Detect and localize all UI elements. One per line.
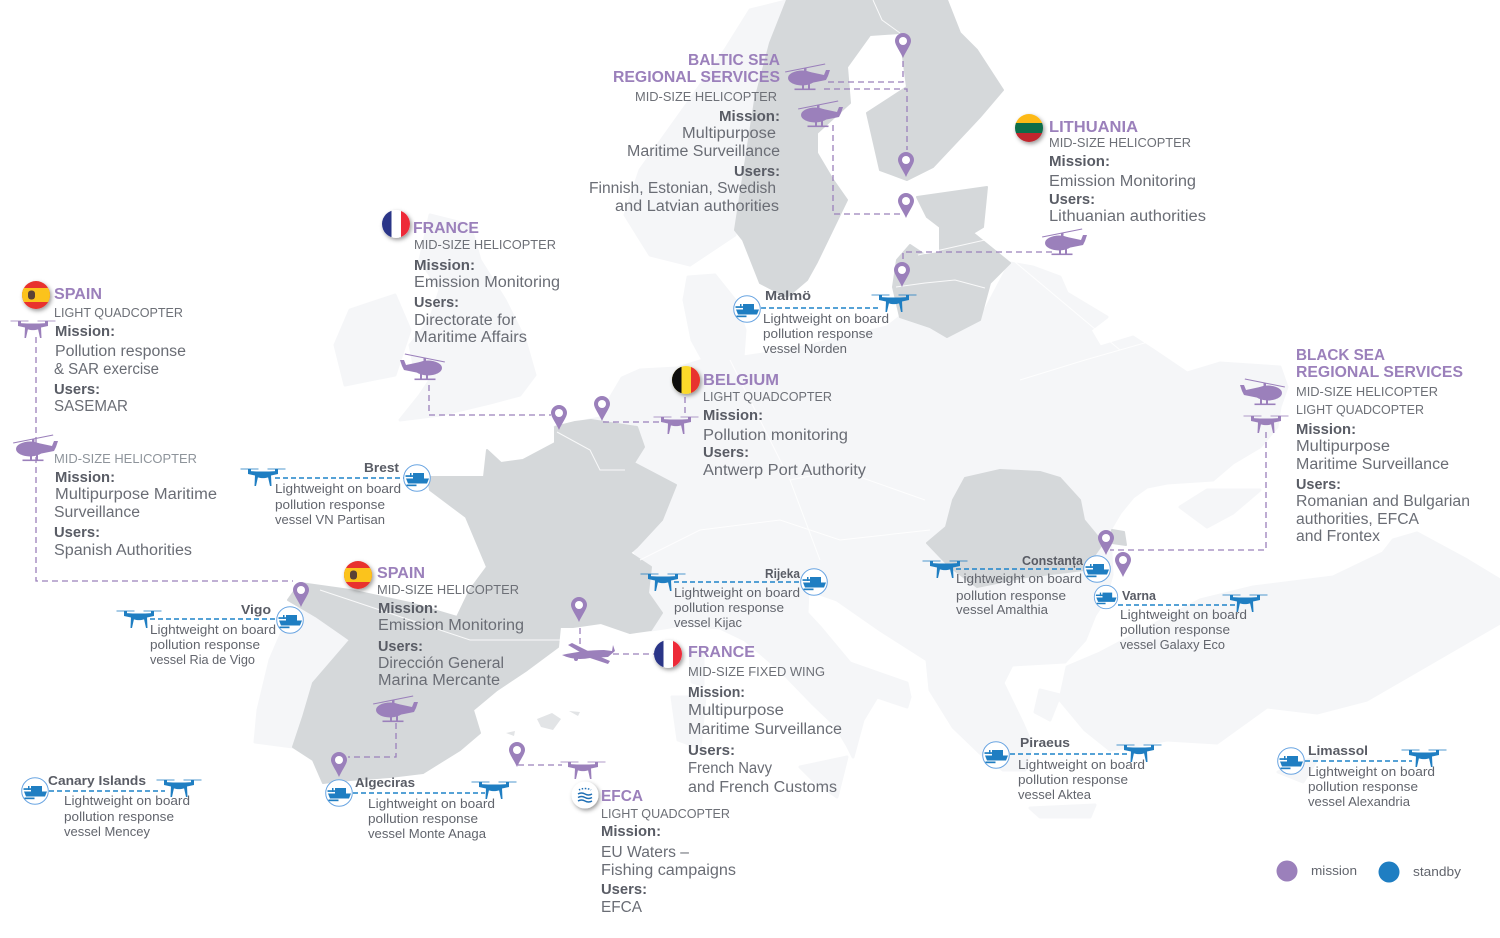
panel: France emission monitoring (382, 210, 560, 346)
panel: Spain emission monitoring (344, 561, 524, 689)
panel: Baltic Sea regional services: Maritime Surveillance (627, 143, 780, 160)
vessel: Algeciras: vessel Monte Anaga (368, 827, 486, 841)
vessel: Rijeka: Lightweight on board (674, 586, 800, 600)
vessel: Piraeus: Piraeus (1020, 735, 1070, 750)
panel: Spain left, quadcopter and helicopter (22, 281, 217, 559)
panel: Belgium: LIGHT QUADCOPTER (703, 389, 832, 404)
panel: EFCA: Mission: (601, 823, 661, 840)
panel: Lithuania: Lithuanian authorities (1049, 208, 1206, 225)
panel: Spain left, quadcopter and helicopter: SASEMAR (54, 398, 128, 415)
panel: France emission monitoring: Maritime Affairs (414, 329, 527, 346)
panel: EFCA: Fishing campaigns (601, 862, 736, 879)
panel: France emission monitoring: FRANCE (413, 220, 479, 237)
mission aircraft icons (10, 64, 1288, 779)
vessel: Constanța: Lightweight on board (956, 572, 1082, 586)
panel: Black Sea regional services: Mission: (1296, 421, 1356, 438)
panel: Baltic Sea regional services (589, 52, 780, 215)
panel: EFCA: EFCA (601, 788, 643, 805)
panel: Black Sea regional services (1296, 347, 1470, 545)
panel: Spain left, quadcopter and helicopter: Multipurpose Maritime (55, 486, 217, 503)
legend: standby (1413, 865, 1462, 879)
panel: Black Sea regional services: BLACK SEA (1296, 347, 1385, 364)
panel: Belgium: Users: (703, 444, 749, 461)
panel: Spain left, quadcopter and helicopter: Mission: (55, 469, 115, 486)
panel: Baltic Sea regional services: Mission: (719, 108, 780, 125)
panel: Spain left, quadcopter and helicopter: Users: (54, 381, 100, 398)
vessel: Varna: Lightweight on board (1120, 608, 1247, 622)
vessel: Vigo: Vigo (241, 602, 271, 617)
panel: Baltic Sea regional services: MID-SIZE HELICOPTER (635, 89, 777, 104)
vessel: Varna: vessel Galaxy Eco (1120, 638, 1225, 652)
legend (1276, 860, 1462, 882)
panel: France emission monitoring: MID-SIZE HELICOPTER (414, 237, 556, 252)
panel: Spain left, quadcopter and helicopter: Surveillance (54, 504, 140, 521)
vessel: Constanța (922, 553, 1110, 617)
panel: Baltic Sea regional services: REGIONAL SERVICES (613, 69, 780, 86)
panel: France emission monitoring: Emission Monitoring (414, 274, 560, 291)
panel: France emission monitoring: Directorate for (414, 312, 516, 329)
panel: Belgium (672, 366, 866, 479)
panel: Lithuania: LITHUANIA (1049, 119, 1138, 136)
panel: France emission monitoring: Mission: (414, 257, 475, 274)
vessel: Varna: pollution response (1120, 623, 1230, 637)
panel: Black Sea regional services: and Frontex (1296, 528, 1380, 545)
panel: France fixed wing (654, 640, 842, 796)
vessel: Malmö: Lightweight on board (763, 312, 889, 326)
panel: Spain emission monitoring: SPAIN (377, 565, 425, 582)
map of Europe (255, 0, 1500, 817)
vessel: Varna: Varna (1122, 588, 1157, 603)
panel: Lithuania: Emission Monitoring (1049, 173, 1196, 190)
vessel: Rijeka: Rijeka (765, 566, 801, 581)
vessel: Rijeka: vessel Kijac (674, 616, 742, 630)
panel: France fixed wing: Mission: (688, 684, 745, 701)
vessel: Piraeus: Lightweight on board (1018, 758, 1145, 772)
panel: Black Sea regional services: MID-SIZE HELICOPTER (1296, 384, 1438, 399)
panel: EFCA: Users: (601, 881, 647, 898)
vessel: Constanța: Constanța (1022, 553, 1084, 568)
vessel: Canary Islands: Lightweight on board (64, 794, 190, 808)
vessel: Rijeka: pollution response (674, 601, 784, 615)
icon: fixed wing aircraft (562, 643, 615, 664)
panel: EFCA: EFCA (601, 899, 643, 916)
vessel: Piraeus: pollution response (1018, 773, 1128, 787)
panel: Spain left, quadcopter and helicopter: LIGHT QUADCOPTER (54, 305, 183, 320)
vessel: Malmö: vessel Norden (763, 342, 847, 356)
panel: France fixed wing: Users: (688, 742, 735, 759)
panel: Baltic Sea regional services: BALTIC SEA (688, 52, 780, 69)
panel: Lithuania (1015, 114, 1206, 225)
panel: Black Sea regional services: Romanian and Bulgarian (1296, 493, 1470, 510)
land: highlighted countries (288, 0, 1126, 783)
panel: Black Sea regional services: Maritime Surveillance (1296, 456, 1449, 473)
panel: Spain left, quadcopter and helicopter: Users: (54, 524, 100, 541)
route lines to mission pins (36, 58, 1266, 765)
panel: Lithuania: Mission: (1049, 153, 1110, 170)
icon: Belgium flag (672, 366, 700, 394)
vessel: Varna (1094, 585, 1268, 652)
panel: EFCA: EU Waters – (601, 844, 689, 861)
panel: Spain left, quadcopter and helicopter: SPAIN (54, 286, 102, 303)
vessel: Canary Islands: pollution response (64, 810, 174, 824)
icon: France flag (382, 210, 410, 238)
panel: Baltic Sea regional services: Users: (734, 163, 780, 180)
panel: Spain left, quadcopter and helicopter: & SAR exercise (54, 361, 159, 378)
panel: Baltic Sea regional services: Finnish, Estonian, Swedish (589, 180, 776, 197)
icon: France flag (654, 640, 682, 668)
vessel: Brest: Brest (364, 460, 400, 475)
vessel: Rijeka (640, 566, 827, 630)
panel: France fixed wing: FRANCE (688, 644, 755, 661)
icon: Lithuania flag (1015, 114, 1043, 142)
legend: mission (1311, 864, 1357, 878)
panel: Spain emission monitoring: Mission: (378, 600, 438, 617)
panel: Black Sea regional services: LIGHT QUADCOPTER (1296, 402, 1424, 417)
panel: Spain left, quadcopter and helicopter: Spanish Authorities (54, 542, 192, 559)
vessel: Vigo: Lightweight on board (150, 623, 276, 637)
icon: Spain flag (344, 561, 372, 589)
vessel: Limassol (1278, 743, 1446, 809)
icon: EFCA logo (572, 782, 598, 808)
vessel: Brest (240, 460, 430, 527)
panel: Black Sea regional services: Users: (1296, 476, 1341, 493)
panel: France emission monitoring: Users: (414, 294, 459, 311)
panel: Belgium: Pollution monitoring (703, 427, 848, 444)
vessel: Algeciras: Algeciras (355, 775, 415, 790)
panel: Belgium: Antwerp Port Authority (703, 462, 866, 479)
vessel: Piraeus (983, 735, 1162, 802)
panel: Belgium: BELGIUM (703, 372, 779, 389)
icon: Spain flag (22, 281, 50, 309)
vessel: Brest: Lightweight on board (275, 482, 401, 496)
vessel: Constanța: vessel Amalthia (956, 603, 1048, 617)
panel: Spain left, quadcopter and helicopter: Mission: (55, 323, 115, 340)
panel: Black Sea regional services: REGIONAL SERVICES (1296, 364, 1463, 381)
panel: Lithuania: MID-SIZE HELICOPTER (1049, 135, 1191, 150)
panel: France fixed wing: Multipurpose (688, 702, 784, 719)
vessel: Canary Islands (22, 773, 202, 839)
land: light countries (255, 0, 1500, 817)
panel: Spain emission monitoring: Dirección General (378, 655, 504, 672)
panel: Black Sea regional services: Multipurpose (1296, 438, 1390, 455)
vessel: Vigo: pollution response (150, 638, 260, 652)
panel: France fixed wing: French Navy (688, 760, 772, 777)
panel: Spain emission monitoring: Marina Mercante (378, 672, 500, 689)
vessel: Limassol: vessel Alexandria (1308, 795, 1410, 809)
panel: Spain emission monitoring: Users: (378, 638, 423, 655)
vessel: Limassol: Lightweight on board (1308, 765, 1435, 779)
panel: EFCA: LIGHT QUADCOPTER (601, 806, 730, 821)
panel: Spain left, quadcopter and helicopter: Pollution response (55, 343, 186, 360)
vessel: Vigo: vessel Ria de Vigo (150, 653, 255, 667)
vessel: Algeciras: pollution response (368, 812, 478, 826)
vessel: Canary Islands: vessel Mencey (64, 825, 151, 839)
panel: EFCA (572, 782, 736, 916)
vessel: Vigo (116, 602, 303, 667)
panel: Baltic Sea regional services: and Latvian authorities (615, 198, 779, 215)
vessel: Algeciras: Lightweight on board (368, 797, 495, 811)
vessel: Malmö (734, 288, 916, 356)
vessel: Limassol: pollution response (1308, 780, 1418, 794)
vessel: Limassol: Limassol (1308, 743, 1368, 758)
panel: Baltic Sea regional services: Multipurpose (682, 125, 776, 142)
panel: Spain emission monitoring: MID-SIZE HELICOPTER (377, 582, 519, 597)
vessel: Malmö: Malmö (765, 288, 811, 303)
vessel: Piraeus: vessel Aktea (1018, 788, 1091, 802)
panel: Spain left, quadcopter and helicopter: MID-SIZE HELICOPTER (54, 451, 197, 466)
panel: France fixed wing: MID-SIZE FIXED WING (688, 664, 825, 679)
land: Balearic islands (506, 711, 580, 736)
vessel: Malmö: pollution response (763, 327, 873, 341)
panel: France fixed wing: and French Customs (688, 779, 837, 796)
vessel: Brest: pollution response (275, 498, 385, 512)
panel: Lithuania: Users: (1049, 191, 1095, 208)
panel: France fixed wing: Maritime Surveillance (688, 721, 842, 738)
panel: Black Sea regional services: authorities, EFCA (1296, 511, 1420, 528)
vessel: Canary Islands: Canary Islands (48, 773, 146, 788)
vessel: Brest: vessel VN Partisan (275, 513, 385, 527)
mission location pins (293, 33, 1131, 777)
vessel: Constanța: pollution response (956, 589, 1066, 603)
vessel: Algeciras (326, 775, 516, 841)
panel: Spain emission monitoring: Emission Monitoring (378, 617, 524, 634)
panel: Belgium: Mission: (703, 407, 763, 424)
